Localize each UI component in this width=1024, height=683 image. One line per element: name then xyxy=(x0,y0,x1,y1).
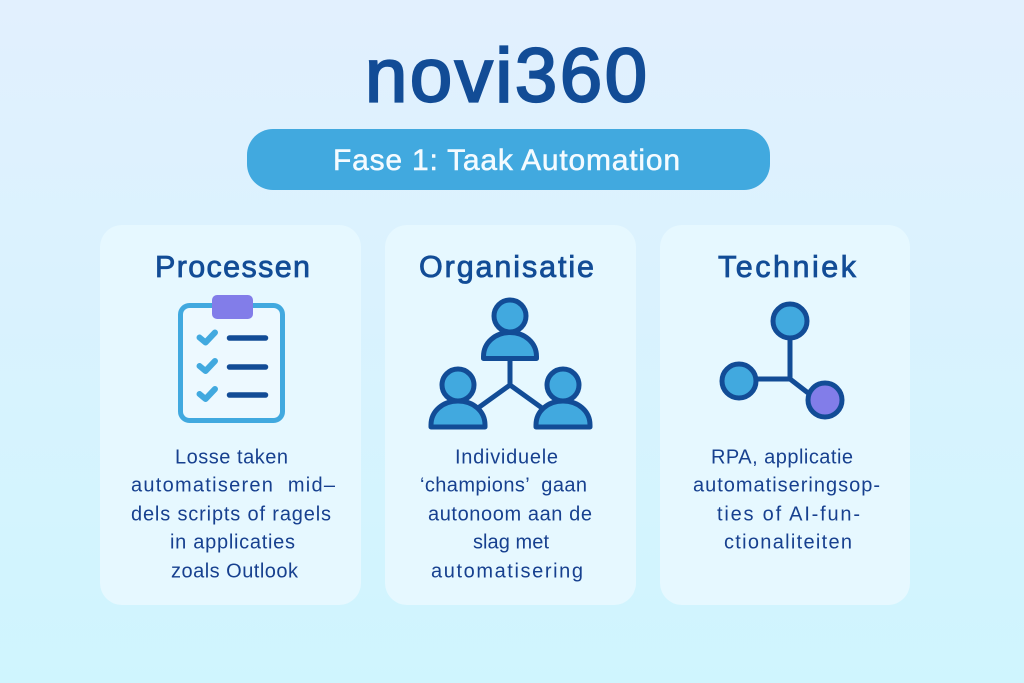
text: Techniek description: ties of AI-fun- xyxy=(717,504,860,526)
text: Processen description: automatiseren mid– xyxy=(131,474,336,496)
title: novi360 xyxy=(365,34,647,118)
text: Processen description xyxy=(131,446,336,582)
text: Organisatie description: Individuele xyxy=(455,446,558,468)
phase banner xyxy=(247,129,770,190)
icon: connected people xyxy=(431,300,590,427)
text: Processen description: Losse taken xyxy=(175,446,288,468)
text: Organisatie description: automatisering xyxy=(431,560,583,582)
text: Processen description: dels scripts of ragels xyxy=(131,504,331,526)
text: Techniek description: automatiseringsop- xyxy=(693,474,880,496)
heading: Processen: Processen xyxy=(155,250,310,284)
heading: Techniek: Techniek xyxy=(718,250,857,284)
text: Processen description: in applicaties xyxy=(170,532,295,554)
panel: Organisatie xyxy=(385,225,636,605)
text: Organisatie description: slag met xyxy=(473,532,549,554)
text: Techniek description: RPA, applicatie xyxy=(711,446,853,468)
heading: Organisatie: Organisatie xyxy=(419,250,594,284)
text: Techniek description xyxy=(693,446,880,554)
text: Processen description: zoals Outlook xyxy=(171,560,299,582)
text: Organisatie description: ‘champions’ gaan xyxy=(420,474,587,496)
text: Organisatie description: autonoom aan de xyxy=(428,504,592,526)
panel: Processen xyxy=(100,225,361,605)
icon: network nodes xyxy=(722,304,842,417)
banner text: Fase 1: Taak Automation xyxy=(333,144,680,177)
text: Techniek description: ctionaliteiten xyxy=(724,532,852,554)
icon: clipboard checklist xyxy=(180,295,282,420)
panel: Techniek xyxy=(660,225,910,605)
text: Organisatie description xyxy=(420,446,592,582)
